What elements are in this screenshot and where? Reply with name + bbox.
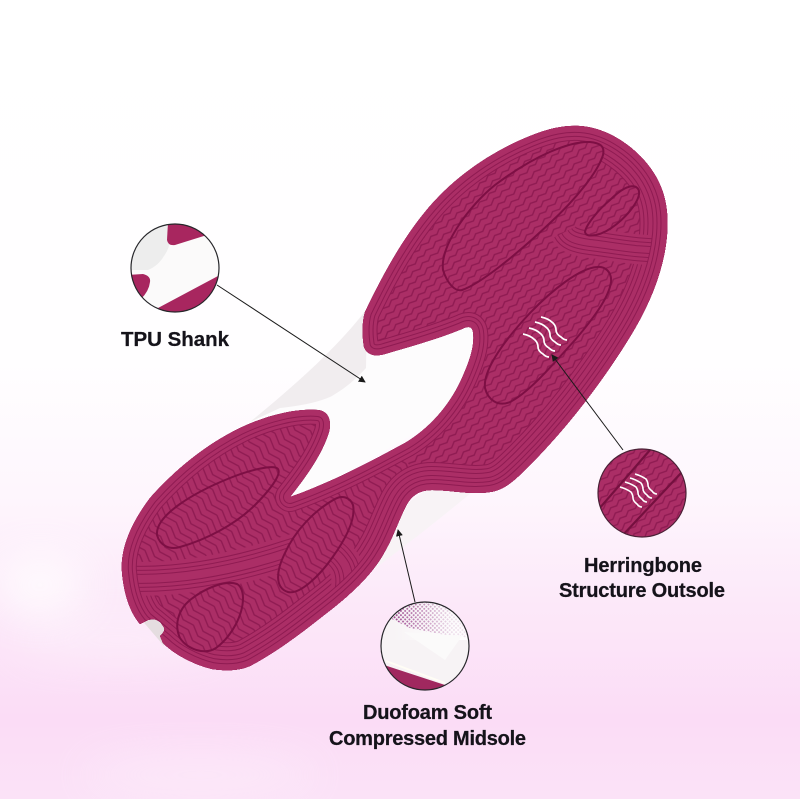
label: Herringbone Structure Outsole: Herringbone [584, 555, 702, 577]
midsole: TPU shank area [140, 306, 480, 646]
arrow: Duofoam leader [398, 530, 415, 602]
forefoot pods [443, 142, 639, 404]
arrow: TPU Shank leader [217, 285, 365, 382]
label: second line: Compressed Midsole [329, 728, 526, 750]
label: Duofoam Soft Compressed Midsole: Duofoam Soft [363, 702, 492, 724]
herringbone logo mark [523, 317, 567, 357]
icon: midsole detail circle [381, 600, 470, 694]
outsole with concentric grooves [110, 110, 680, 680]
callout: Duofoam Soft Compressed Midsole [329, 530, 526, 750]
arrow: Herringbone leader [552, 355, 623, 450]
callout: TPU Shank [121, 220, 365, 382]
callout: Herringbone Structure Outsole [552, 355, 725, 602]
icon: outsole detail circle [598, 449, 686, 537]
heel pods [157, 467, 353, 651]
shoe sole [110, 110, 680, 680]
label: second line: Structure Outsole [559, 580, 725, 602]
icon: TPU shank detail circle [130, 223, 220, 313]
label: TPU Shank: TPU Shank [121, 328, 230, 351]
